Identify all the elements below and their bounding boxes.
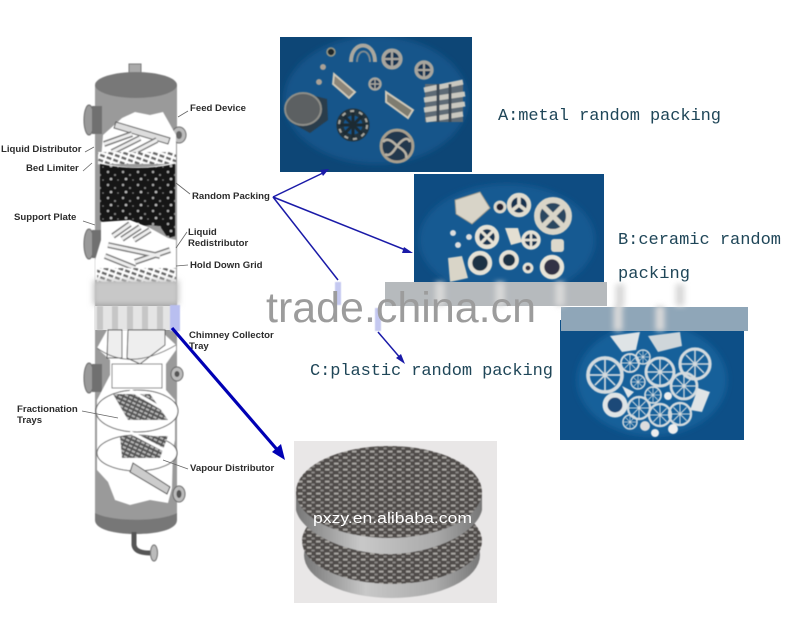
label: chimney collector tray: Tray: [189, 341, 209, 352]
caption B: B:ceramic random: [618, 231, 781, 250]
column shell: [84, 64, 186, 561]
arrow to metal packing: [273, 169, 329, 197]
label: liquid redistributor: Liquid: [188, 227, 217, 238]
band: upper: [385, 282, 607, 306]
label: liquid redistributor: Redistributor: [188, 238, 248, 249]
band: lower: [561, 307, 748, 331]
photo: ceramic random packing: [414, 174, 604, 282]
lower disk: [302, 498, 482, 598]
label: support plate: Support Plate: [14, 212, 76, 223]
label: feed device: Feed Device: [190, 103, 246, 114]
caption A: A:metal random packing: [498, 107, 721, 126]
upper disk: [296, 446, 482, 554]
label: bed limiter: Bed Limiter: [26, 163, 79, 174]
label: random packing: Random Packing: [192, 191, 270, 202]
caption C: C:plastic random packing: [310, 362, 553, 381]
caption B: packing: [618, 265, 690, 284]
label: vapour distributor: Vapour Distributor: [190, 463, 274, 474]
saddle block: [424, 82, 465, 122]
label: chimney collector tray: Chimney Collector: [189, 330, 274, 341]
cylinder: [290, 93, 328, 133]
liquid redistributor: [95, 220, 176, 282]
thick arrow to structured packing: [172, 328, 285, 460]
photo: plastic random packing: [560, 320, 744, 440]
photo: structured packing disks: [294, 441, 497, 603]
watermark bands: [338, 282, 748, 331]
arrow to plastic packing: [273, 197, 405, 364]
band: stripes: [440, 282, 680, 331]
label: fractionation trays: Fractionation: [17, 404, 78, 415]
pale arrow ghosts: [338, 282, 378, 331]
lower cutaway with chimney tray and fractionation trays: [96, 330, 178, 505]
label: liquid distributor: Liquid Distributor: [1, 144, 82, 155]
flower ring: [339, 111, 367, 139]
upper cutaway with distributors: [98, 112, 176, 168]
watermark: trade.china.cn: trade.china.cn: [266, 284, 536, 332]
arrows from random packing: [273, 169, 413, 364]
blurred watermark stripe across column: [93, 280, 180, 331]
random packing bed: [100, 164, 175, 238]
spiral ring: [381, 130, 413, 162]
caption B: [618, 231, 781, 284]
column labels: [1, 103, 274, 474]
label: hold down grid: Hold Down Grid: [190, 260, 263, 271]
watermark: alibaba: pxzy.en.alibaba.com: [313, 511, 472, 527]
leader lines: [82, 111, 190, 469]
photo: metal random packing: [280, 36, 472, 172]
label: fractionation trays: Trays: [17, 415, 42, 426]
column diagram: [82, 64, 190, 561]
arrow to ceramic packing: [273, 197, 413, 253]
